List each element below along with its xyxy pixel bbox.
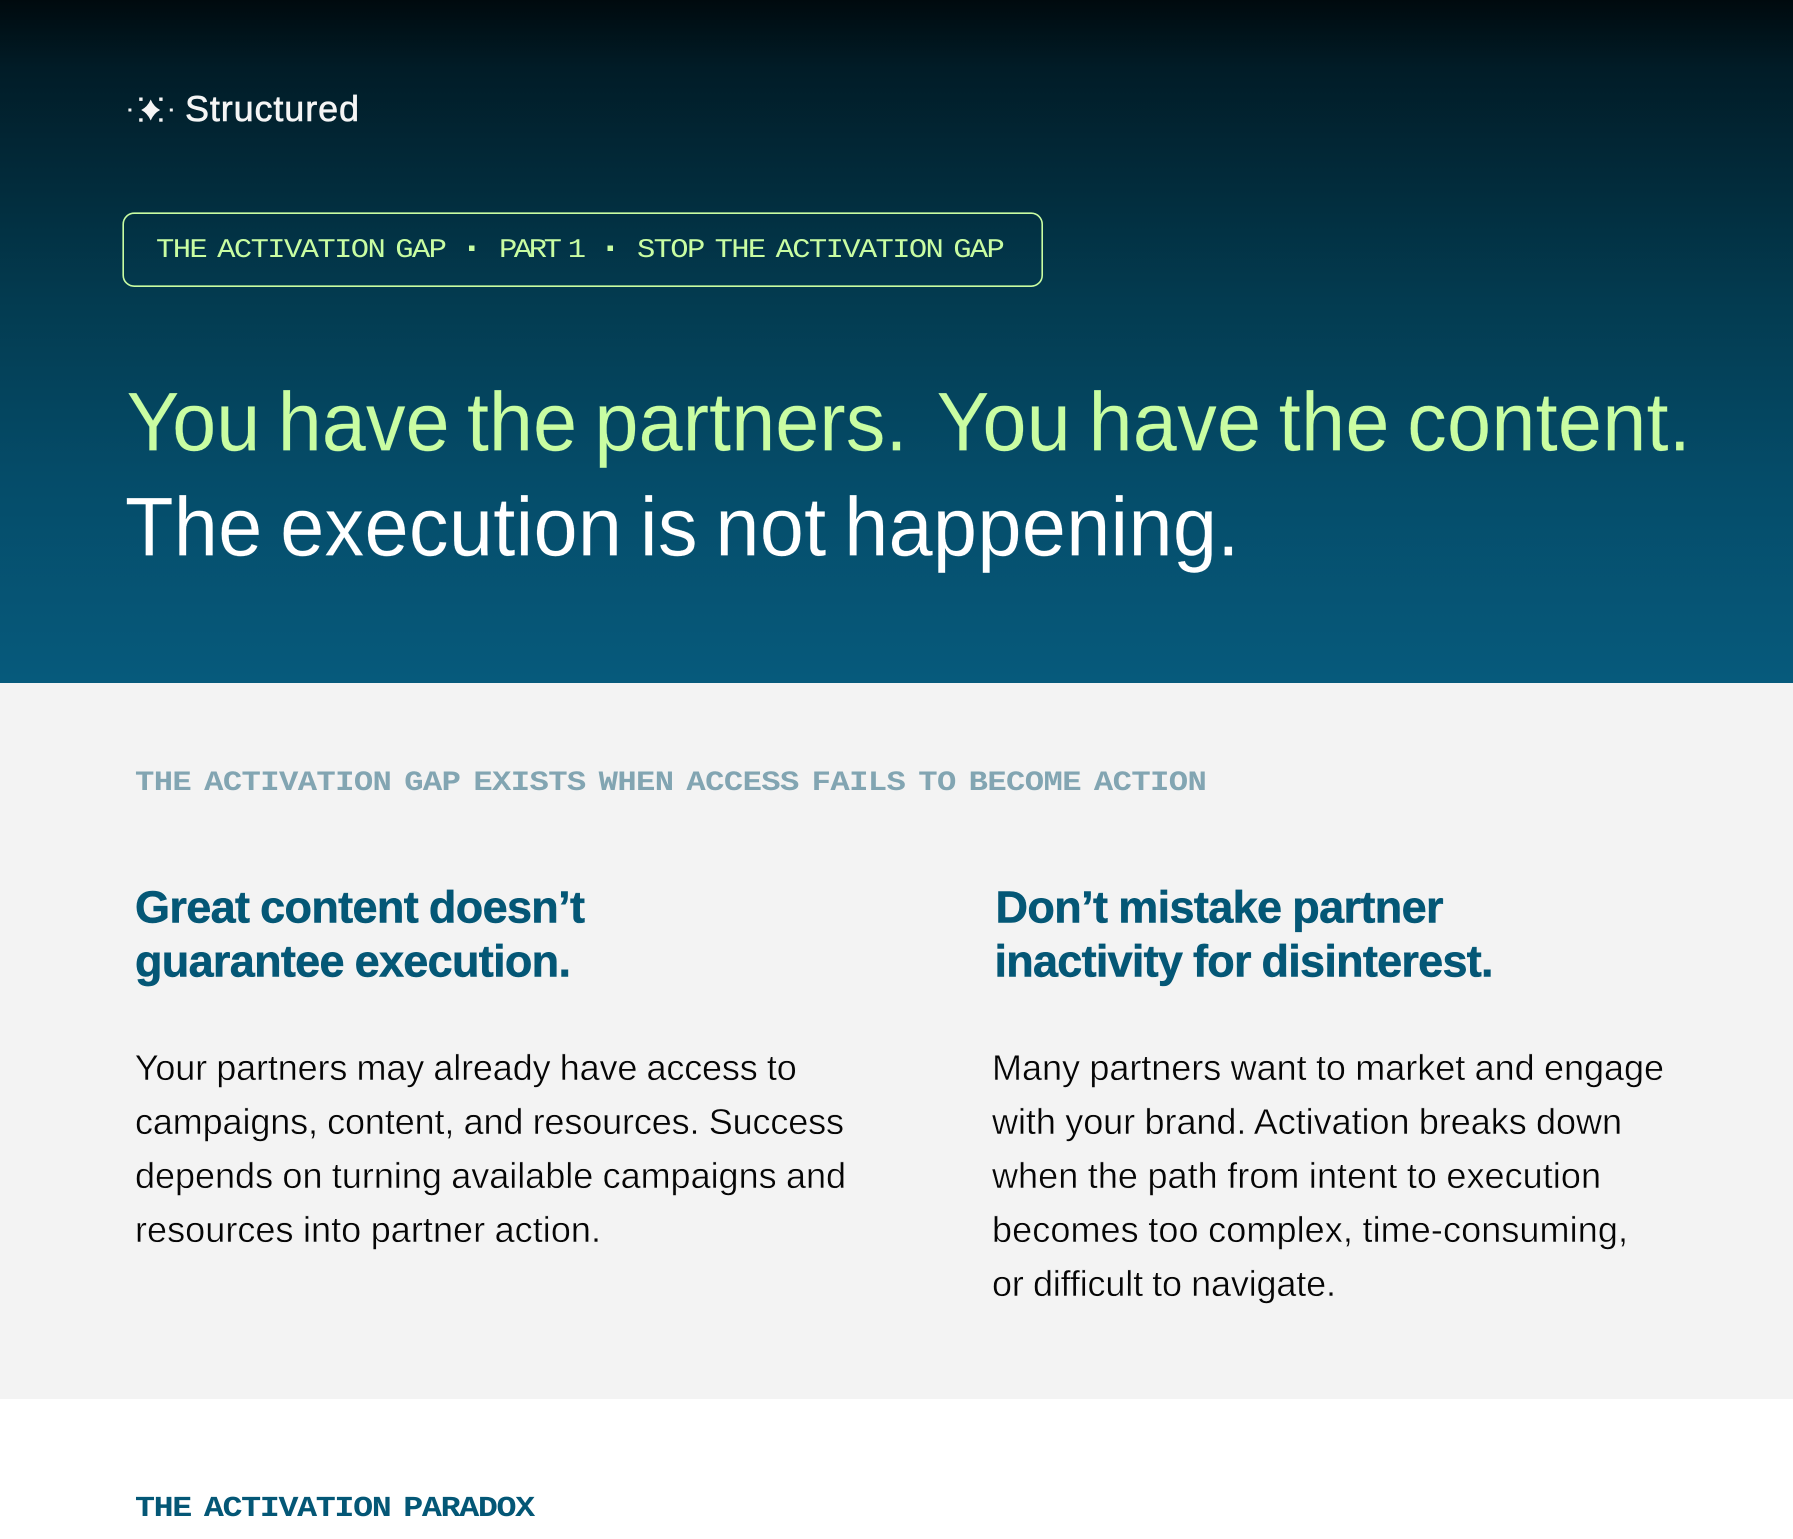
right paragraph: becomes too complex, time-consuming, [992, 1209, 1628, 1250]
right column [991, 882, 1664, 1304]
left paragraph: resources into partner action. [135, 1209, 601, 1250]
headline [125, 374, 1691, 574]
panel background [0, 683, 1793, 1399]
badge text: stop the activation gap: STOP THE ACTIVATION GAP [637, 236, 1005, 266]
badge separator dot [608, 246, 613, 251]
left paragraph: Your partners may already have access to [135, 1047, 797, 1088]
badge text: the activation gap: THE ACTIVATION GAP [156, 236, 447, 266]
section heading: the activation paradox: THE ACTIVATION PARADOX [135, 1492, 536, 1525]
left column [135, 882, 846, 1250]
hero gradient background [0, 0, 1793, 683]
right heading: inactivity for disinterest. [994, 936, 1494, 986]
right heading [994, 882, 1494, 986]
badge outline [123, 213, 1042, 286]
left heading [135, 882, 585, 986]
left heading: guarantee execution. [135, 936, 571, 986]
right paragraph: Many partners want to market and engage [992, 1047, 1664, 1088]
badge separator dot [469, 246, 474, 251]
headline line one, first sentence: You have the partners. [126, 374, 907, 468]
badge text: part 1: PART 1 [499, 236, 586, 266]
right paragraph: or difficult to navigate. [992, 1263, 1336, 1304]
left heading: Great content doesn’t [135, 882, 585, 932]
section eyebrow: THE ACTIVATION GAP EXISTS WHEN ACCESS FAILS TO BECOME ACTION [135, 768, 1207, 799]
left paragraph: campaigns, content, and resources. Success [135, 1101, 844, 1142]
headline line one, second sentence: You have the content. [936, 374, 1691, 468]
headline line two: The execution is not happening. [125, 480, 1239, 574]
right paragraph: with your brand. Activation breaks down [991, 1101, 1622, 1142]
logo wordmark: Structured [185, 88, 359, 129]
right paragraph: when the path from intent to execution [991, 1155, 1601, 1196]
badge: series label [123, 213, 1042, 286]
logo: Structured [128, 88, 359, 129]
panel: activation gap explanation [0, 683, 1793, 1399]
left paragraph [135, 1047, 846, 1250]
right paragraph [991, 1047, 1664, 1304]
right heading: Don’t mistake partner [996, 882, 1444, 932]
icon: sparkle [128, 98, 173, 122]
panel: hero [0, 0, 1793, 683]
left paragraph: depends on turning available campaigns and [135, 1155, 846, 1196]
